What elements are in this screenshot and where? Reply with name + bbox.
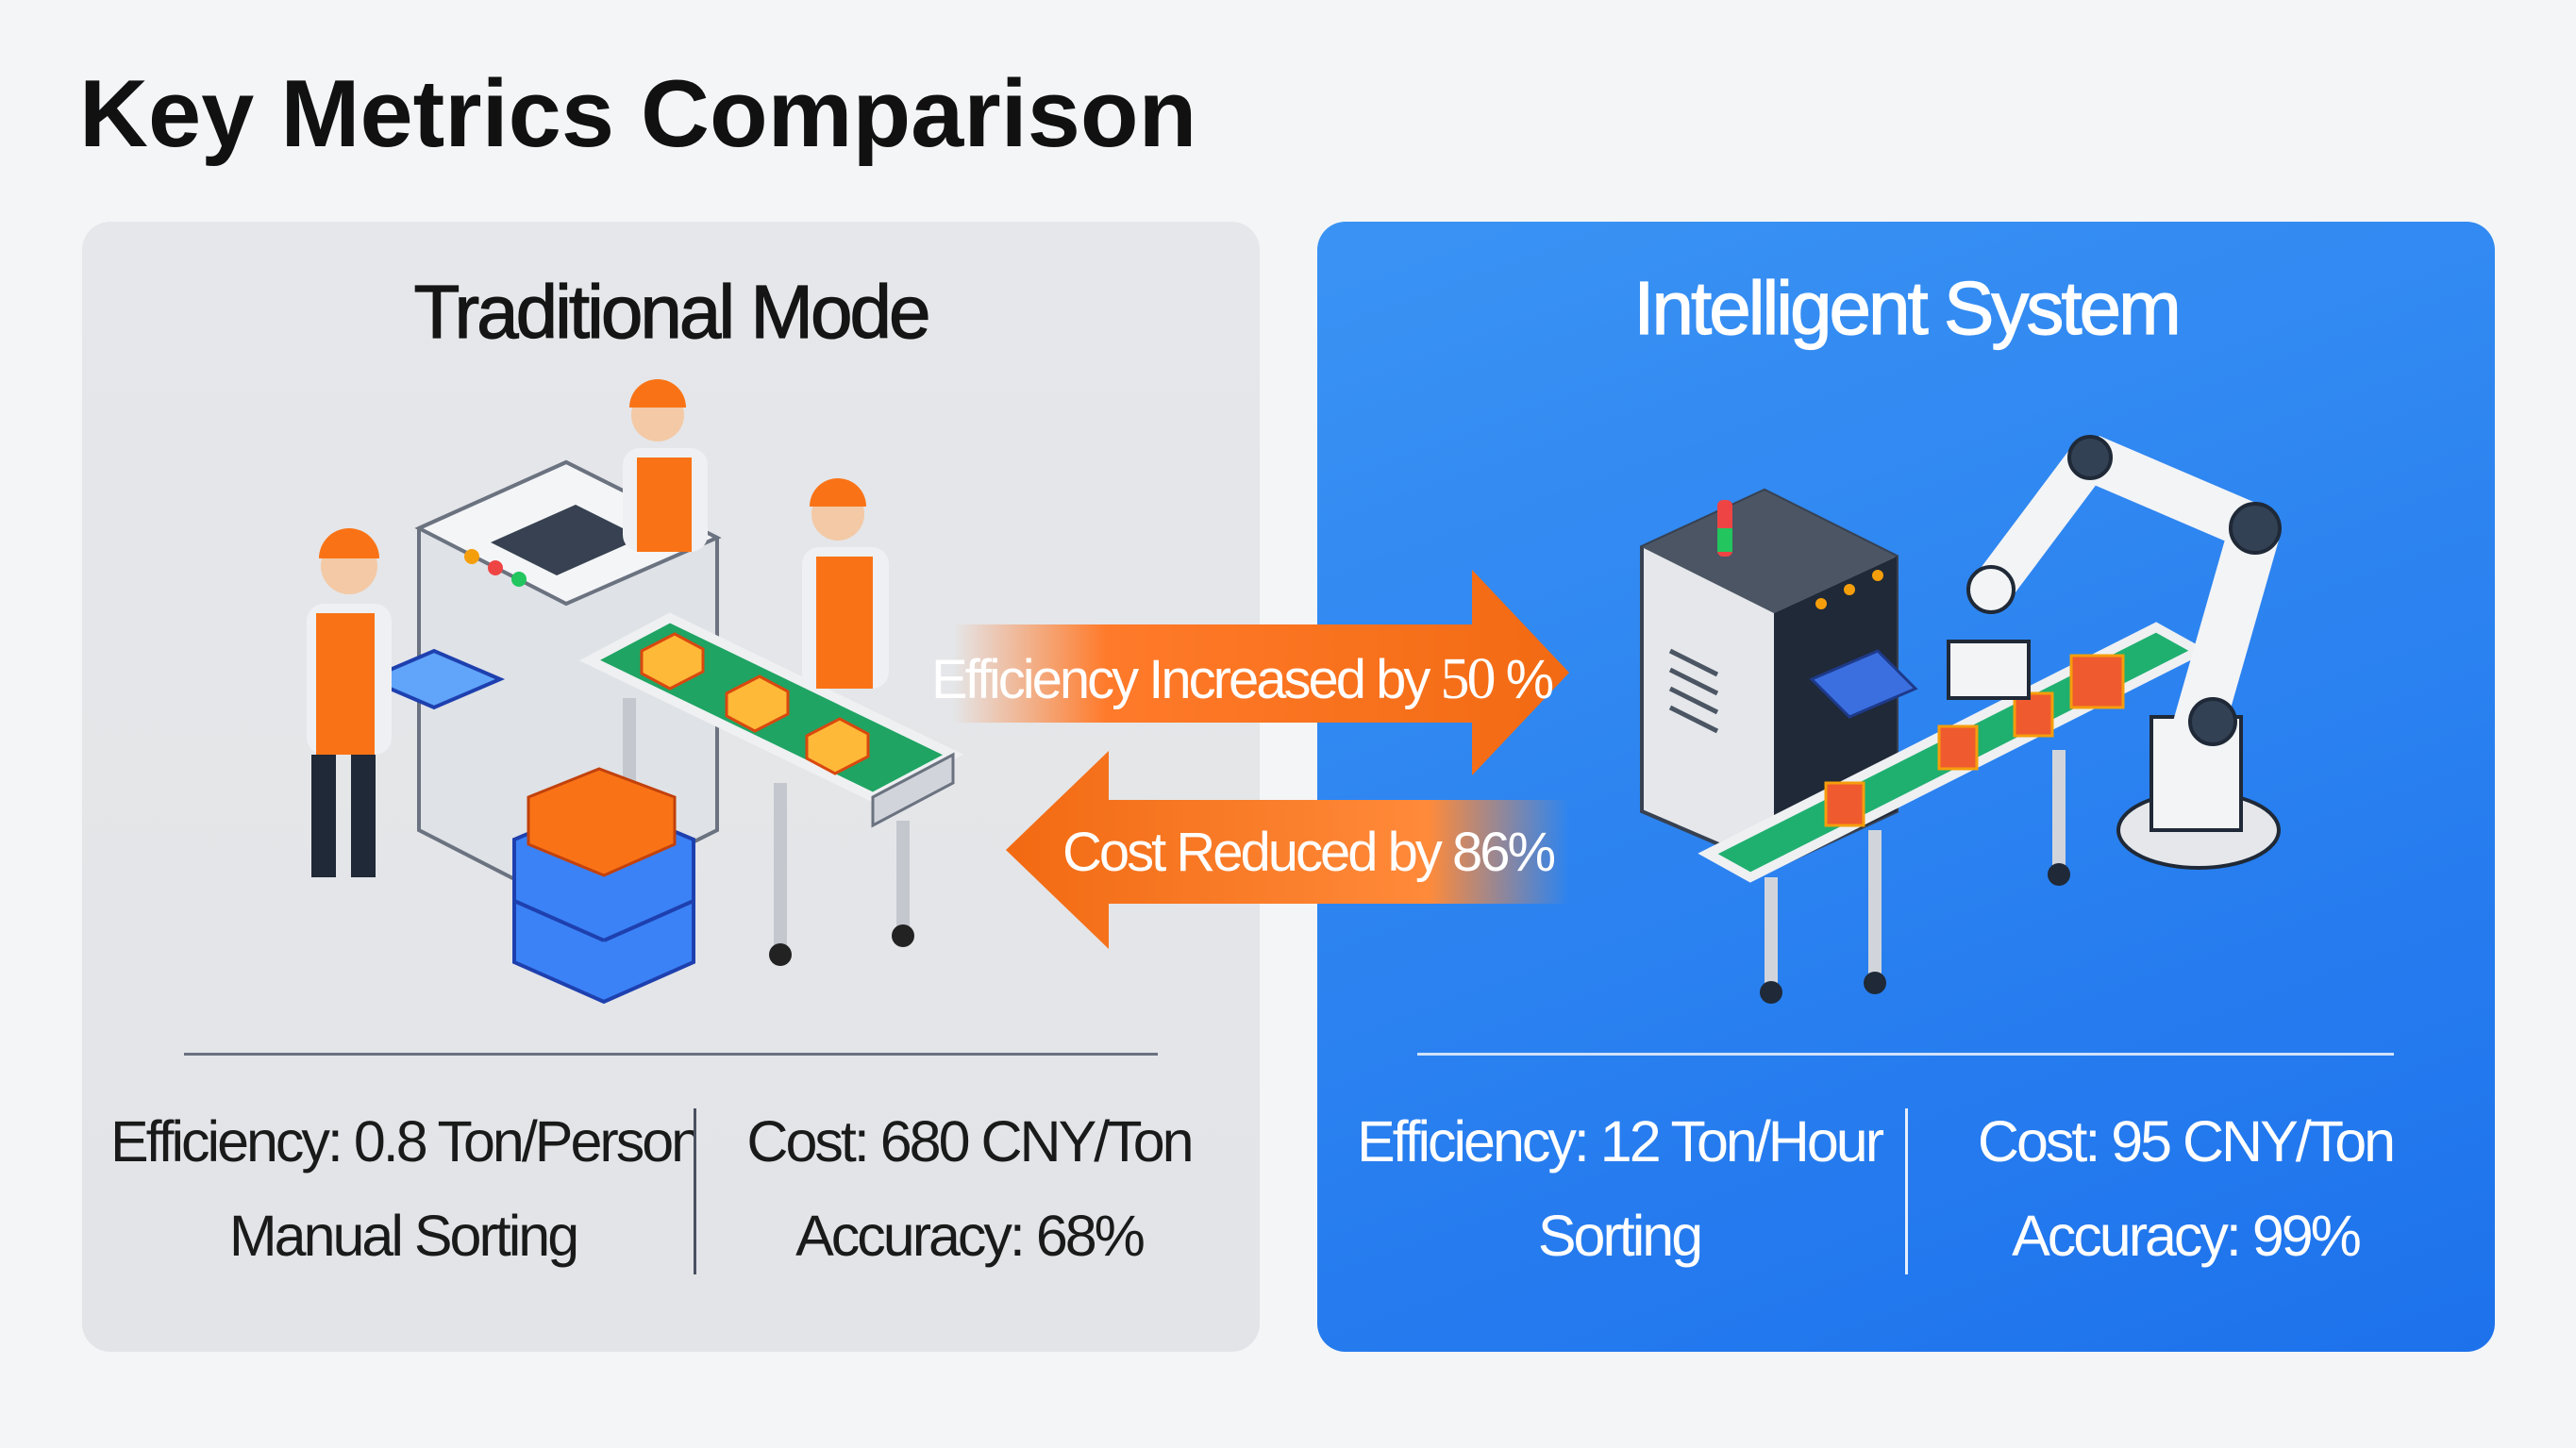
boxes [642, 634, 703, 689]
arrow: cost reduced: Cost Reduced by 86% [1062, 822, 1555, 883]
illustration: intelligent system [1642, 437, 2280, 1004]
conveyor [590, 618, 953, 797]
stats: intelligent left [1357, 1109, 1883, 1268]
stats: intelligent left: Sorting [1538, 1204, 1700, 1268]
packages [1812, 651, 1915, 717]
stats: traditional left: Efficiency: 0.8 Ton/Person [110, 1109, 695, 1173]
stats: traditional left: Manual Sorting [229, 1204, 577, 1268]
arrow: cost reduced [1006, 751, 1569, 949]
stats: intelligent left: Efficiency: 12 Ton/Hour [1357, 1109, 1882, 1173]
arrow: efficiency increased [931, 570, 1569, 775]
arrow: efficiency increased: Efficiency Increased by 50 % [931, 647, 1553, 711]
panel: intelligent system [1317, 222, 2495, 1352]
crates [514, 802, 694, 1002]
stats: intelligent right: Cost: 95 CNY/Ton [1978, 1109, 2393, 1173]
scanner machine [1642, 491, 1897, 868]
panel title: traditional: Traditional Mode [414, 270, 928, 354]
stats: traditional right: Cost: 680 CNY/Ton [746, 1109, 1192, 1173]
stats: intelligent right [1978, 1109, 2393, 1268]
stats: traditional right: Accuracy: 68% [795, 1204, 1143, 1268]
stats: traditional left [110, 1109, 695, 1268]
illustration: traditional sorting [307, 379, 953, 1002]
robot arm [1949, 437, 2280, 868]
machine [419, 462, 717, 906]
panel: traditional mode [82, 222, 1260, 1352]
workers [307, 379, 889, 877]
panel title: intelligent: Intelligent System [1633, 266, 2179, 350]
title: Key Metrics Comparison [79, 61, 1196, 167]
stats: intelligent right: Accuracy: 99% [2012, 1204, 2359, 1268]
conveyor [1708, 627, 2199, 877]
stats: traditional right [746, 1109, 1192, 1268]
